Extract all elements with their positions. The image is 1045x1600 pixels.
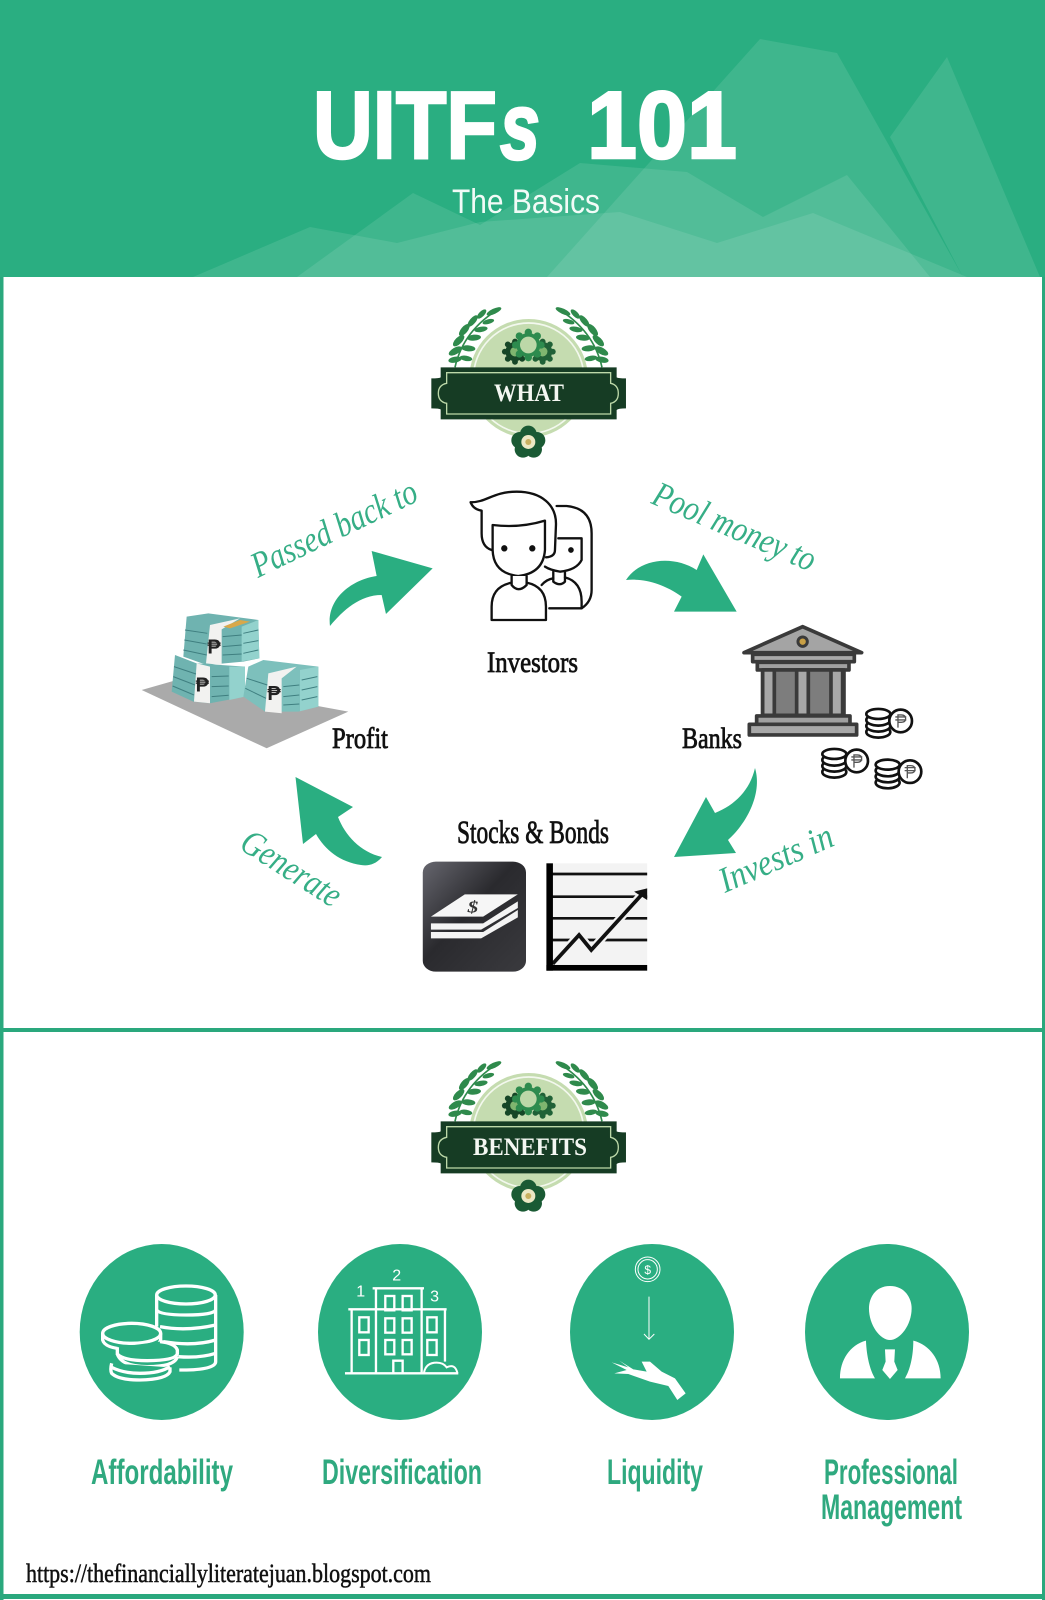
- label: diversification: Diversification: [322, 1453, 482, 1492]
- icon: rising line chart: [546, 863, 647, 971]
- title: s: [500, 73, 540, 180]
- script label: pool money to: Pool money to: [646, 473, 822, 579]
- label: stocks and bonds: Stocks & Bonds: [457, 815, 609, 851]
- label: affordability: Affordability: [91, 1453, 233, 1492]
- label: investors: Investors: [487, 646, 578, 679]
- panel: what: [142, 306, 921, 972]
- badge: what: WHAT: [494, 380, 564, 407]
- icon: professional manager: [805, 1244, 969, 1420]
- arrow: pool money: [626, 554, 737, 612]
- icon: profit money stacks: ₱: [196, 675, 210, 697]
- icon: diversification buildings: [318, 1244, 482, 1420]
- icon: liquidity hand and coin: $: [644, 1263, 651, 1277]
- label: professional management: [821, 1453, 962, 1527]
- icon: diversification buildings: 1: [356, 1284, 365, 1301]
- icon: investors: [471, 492, 592, 620]
- icon: affordability coins: [80, 1244, 244, 1420]
- badge: benefits: BENEFITS: [473, 1134, 587, 1161]
- label: banks: Banks: [682, 722, 742, 755]
- script label: generate: Generate: [234, 821, 350, 915]
- title: [313, 72, 737, 180]
- label: professional management: Management: [821, 1488, 962, 1527]
- badge: benefits: [431, 1060, 626, 1212]
- panel: benefits: [26, 1060, 969, 1588]
- icon: profit money stacks: [142, 613, 348, 748]
- label: professional management: Professional: [824, 1453, 958, 1492]
- source url: https://thefinanciallyliteratejuan.blogspot.com: [26, 1559, 431, 1588]
- label: profit: Profit: [332, 722, 389, 755]
- icon: bank: [744, 627, 862, 735]
- icon: money stack tile: $: [467, 898, 479, 917]
- script label: passed back to: Passed back to: [243, 471, 424, 586]
- icon: profit money stacks: ₱: [267, 683, 281, 705]
- title: 101: [587, 72, 737, 179]
- icon: money stack tile: [423, 862, 526, 972]
- title: UITF: [313, 72, 497, 179]
- icon: profit money stacks: ₱: [207, 636, 221, 658]
- script label: invests in: Invests in: [711, 816, 839, 901]
- arrow: passed back: [330, 551, 433, 626]
- icon: liquidity hand and coin: [570, 1244, 734, 1420]
- subtitle: The Basics: [452, 183, 600, 221]
- label: liquidity: Liquidity: [607, 1453, 703, 1492]
- header banner: [0, 0, 1045, 277]
- icon: coins near bank: [822, 709, 921, 788]
- icon: diversification buildings: 2: [392, 1268, 401, 1285]
- arrow: generate: [296, 777, 382, 865]
- arrow: invests in: [674, 768, 757, 857]
- badge: what: [431, 306, 626, 458]
- icon: diversification buildings: 3: [430, 1289, 439, 1306]
